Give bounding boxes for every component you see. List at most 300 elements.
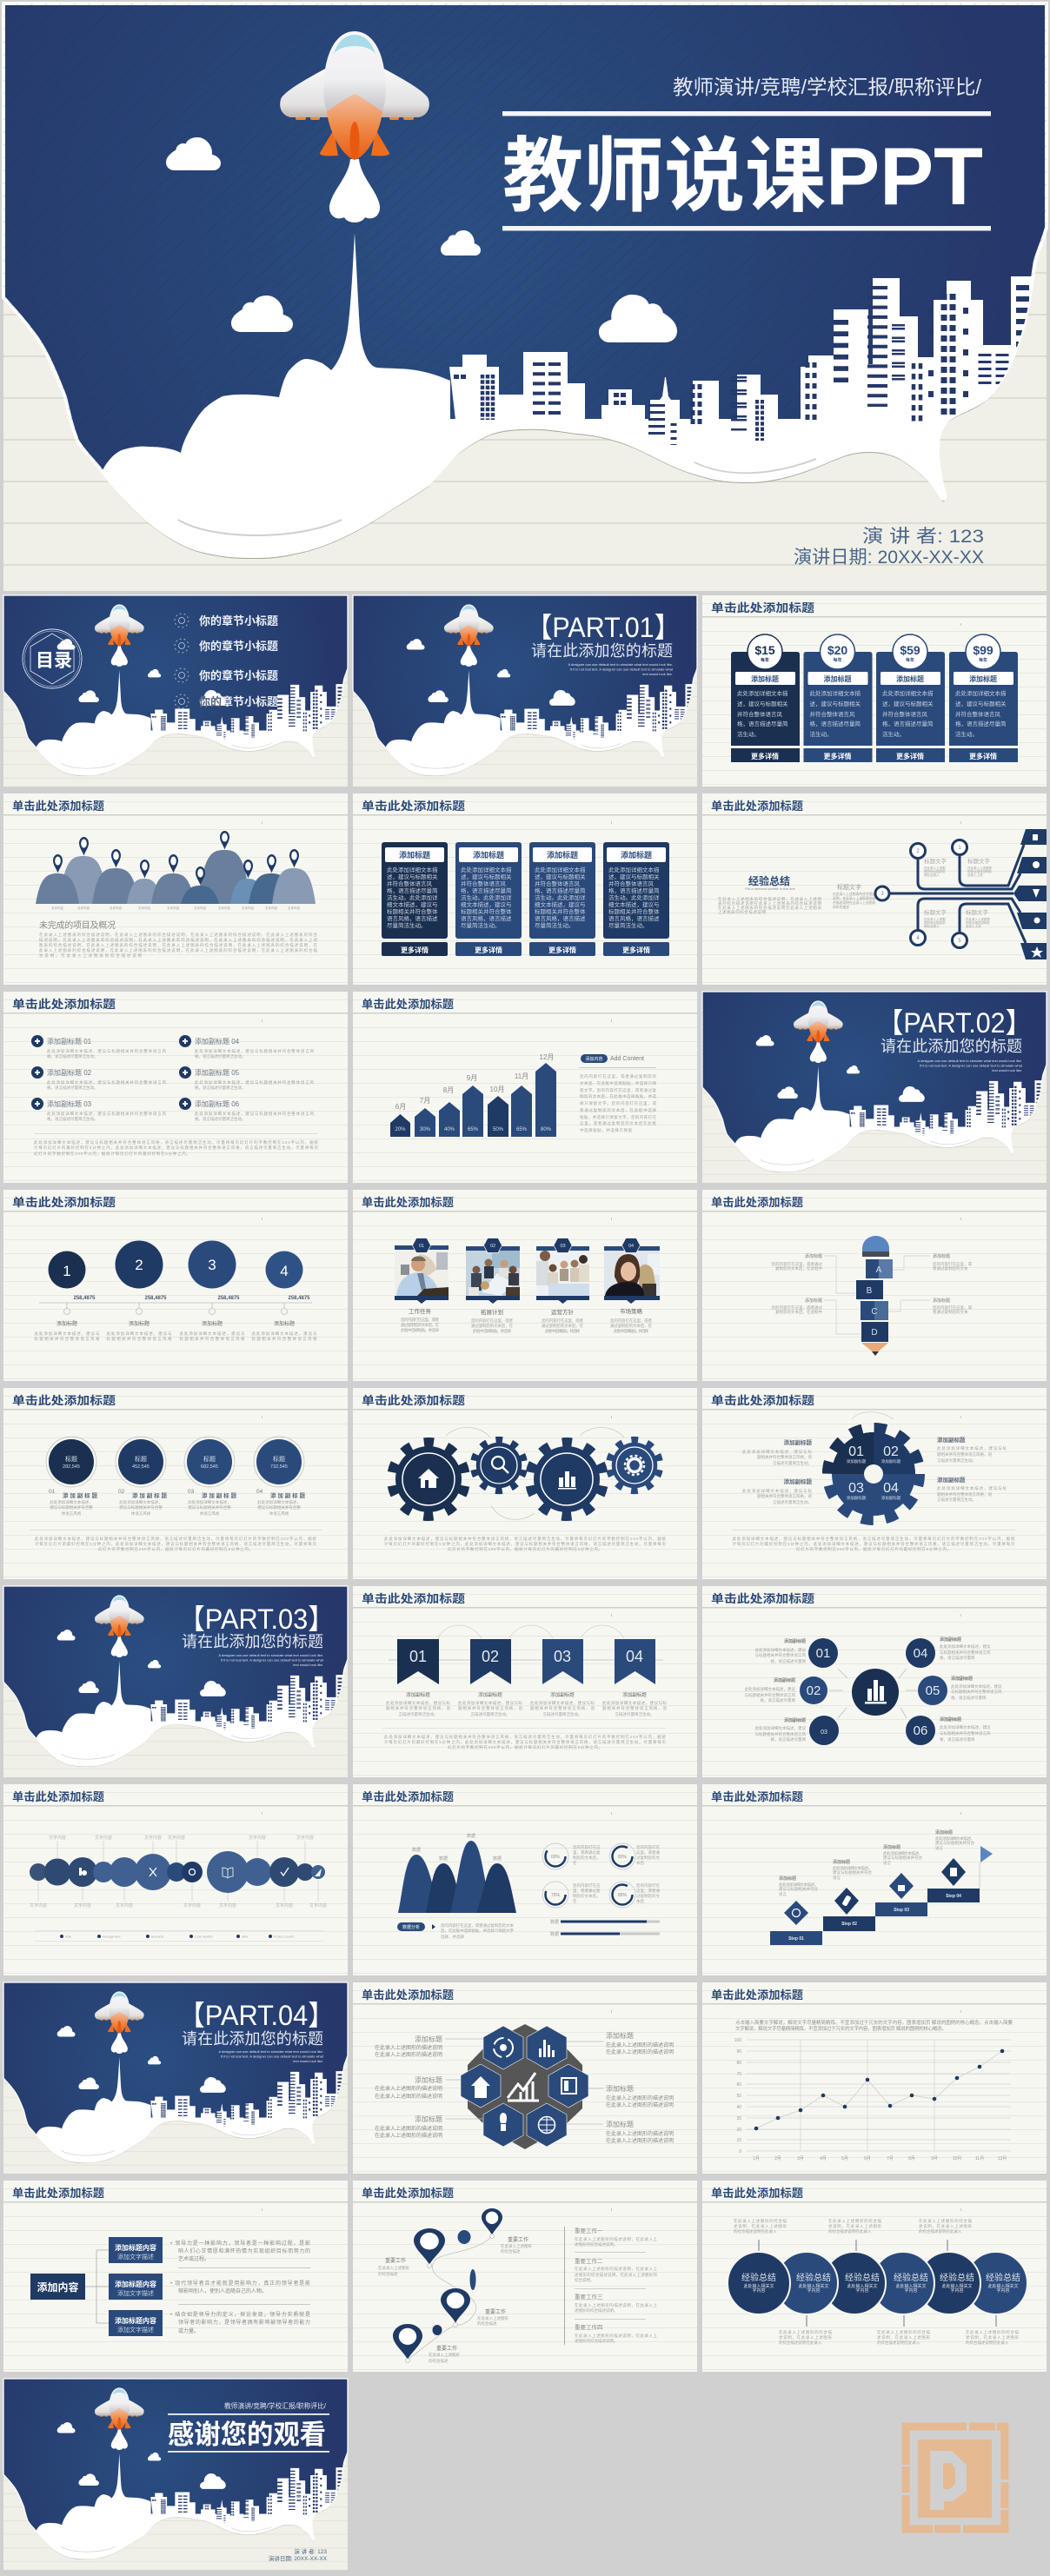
bar chart: 8月: [443, 1086, 454, 1094]
slide title: 单击此处添加标题: [12, 1394, 116, 1407]
quadrant gear: 02: [883, 1444, 899, 1459]
subtitles: 此处添加详细文本描述，: [188, 1499, 231, 1505]
number circles: [49, 1241, 302, 1288]
donut captions: 过复制您的文: [636, 1893, 660, 1899]
data circles: 282,545: [63, 1464, 80, 1470]
right labels: 者通过复制您的文本: [933, 1265, 968, 1271]
right labels: 添加标题: [933, 1253, 950, 1259]
quadrant gear: 添加副标题: [881, 1458, 901, 1464]
photo captions: 通过复制您的文本后，在: [401, 1322, 440, 1328]
legend: Role: [65, 1935, 71, 1938]
slide: thank you: [3, 2379, 348, 2570]
ribbon captions: 题相关并符合整体语言风格，语: [386, 1705, 450, 1711]
axis and arcs: [389, 1625, 663, 1660]
line chart: 100: [734, 2038, 741, 2043]
root box: [30, 2274, 85, 2300]
values: 258,4875: [73, 1296, 96, 1301]
stair notes: 语言: [935, 1845, 943, 1851]
right labels: 添加标题: [933, 1298, 950, 1304]
card 1: 每年: [761, 657, 769, 663]
circuit tree diagram: [875, 840, 1026, 947]
left notes: 添加副标题: [784, 1717, 806, 1723]
quadrant gear: 04: [883, 1481, 899, 1496]
card 3: 每年: [906, 657, 914, 663]
right notes: 言描述尽量简洁生动。: [937, 1457, 976, 1464]
slide title: 单击此处添加标题: [711, 1196, 803, 1209]
labels: 添加标题: [129, 1320, 150, 1327]
card 1: 并符合整体语言风: [737, 710, 782, 718]
contents list: 你的章节小标题: [199, 695, 278, 708]
donut captions: 里，或者通过复: [573, 1888, 601, 1894]
slide title: 单击此处添加标题: [362, 998, 454, 1011]
card 1: 标题相关并符合整体: [387, 907, 438, 915]
part heading: 【PART.01】: [526, 612, 681, 643]
slide: contents: [3, 595, 348, 787]
bubble labels: 文字内容: [30, 1902, 47, 1909]
spokes: [829, 1669, 918, 1718]
ribbon captions: [386, 1691, 668, 1717]
body text: 在此录入上述图表的综合描述说明，在此录入上述图表的综合描述说明，在此录入上述图表的综合描述说明，在此录入上述图表的综合: [39, 932, 318, 938]
footnote text: 此处添加详细文本描述，建议与标题相关并符合整体语言风格，语言描述尽量简洁生动。尽量将每页幻灯片的字数控制在200字以内，据统: [34, 1139, 318, 1145]
slide: hub and spokes: [702, 1586, 1047, 1777]
branch labels: 的综合描述说明在: [966, 920, 990, 925]
cover art: [3, 1982, 348, 2174]
circle labels: 经验总结: [741, 2272, 776, 2283]
quadrant gear: 添加副标题: [847, 1495, 867, 1501]
presenter info: [269, 2547, 328, 2562]
hills chart: 文本内容: [138, 906, 150, 910]
data circles: 标题: [135, 1455, 147, 1463]
labels: 添加标题: [56, 1320, 77, 1327]
branch labels: 表的综合描述说: [924, 920, 946, 925]
right labels: 者通过复制您的文本: [933, 1309, 968, 1315]
list items left: 此处添加详细文本描述，建议与标题相关并符合整体语言风: [47, 1048, 167, 1054]
footnote text: 计每页幻灯片的最好控制在5分钟之内。此处添加详细文本描述，建议与标题相关并符合整体语言风格，语言描述尽量简洁生动。尽量将每页: [34, 1145, 318, 1151]
slide title: 单击此处添加标题: [711, 601, 814, 614]
line chart: 4月: [820, 2156, 827, 2161]
card 1: 并符合整体语言风: [387, 880, 433, 887]
data circles: 732,545: [270, 1464, 288, 1470]
circle labels: 字内容: [904, 2287, 918, 2294]
stair notes: 语言: [833, 1875, 841, 1881]
branch box 3: 添加标题内容: [115, 2316, 156, 2325]
right notes: 在此录入上述图形的描述说明: [606, 2137, 674, 2144]
branch text: 响人们心甘情愿和满怀热情为实现组织目标而努力的: [178, 2247, 310, 2254]
left notes: [375, 2035, 483, 2139]
bottom notes: 的综合描述说明在此录入: [966, 2340, 1009, 2346]
donut captions: 这里，或者通: [636, 1888, 660, 1894]
left labels: 您的内容打在这里，或者通过: [772, 1305, 822, 1311]
right edge icon tabs: [1013, 829, 1047, 959]
labels: 此处添加详细文本描述，建议与: [179, 1331, 245, 1337]
branch labels: 表的综合描述说: [924, 869, 946, 873]
left notes: 题相关并符合整体语言风格，语: [757, 1454, 812, 1460]
slide: numbered circles timeline: [3, 1190, 348, 1381]
card 2: 更多详情: [824, 752, 852, 760]
right notes: 在此录入上述图形的描述说明: [606, 2095, 674, 2101]
bubble labels: 文字内容: [296, 1835, 314, 1841]
card 4: 格，语言描述尽量简: [608, 886, 660, 894]
left notes: 在此录入上述图形的描述说明: [375, 2093, 442, 2100]
card 4: 并符合整体语言风: [608, 880, 654, 887]
card 3: 并符合整体语言风: [882, 710, 928, 718]
slide: line chart: [702, 1982, 1047, 2174]
line chart: 80: [736, 2061, 741, 2066]
circle labels: 字内容: [996, 2287, 1010, 2294]
donut captions: 您的内容打在这: [573, 1882, 601, 1889]
bar chart: 11月: [515, 1072, 528, 1080]
branch labels: 标题文字: [966, 908, 989, 916]
presenter info: 演讲日期: 20XX-XX-XX: [794, 548, 984, 568]
bar chart: 12月: [540, 1053, 554, 1061]
part heading: 【PART.02】: [877, 1007, 1032, 1039]
hills chart: 文本内容: [77, 906, 90, 910]
data pill note: 后，在此框中选择粘贴，并选择只保留文字: [441, 1928, 515, 1934]
photo card 3: [536, 1238, 589, 1304]
left notes: 添加副标题: [784, 1638, 806, 1644]
photo captions: [401, 1307, 652, 1334]
number circles: 1: [63, 1263, 71, 1279]
labels: 标题相关并符合整体语言风格: [35, 1336, 100, 1342]
subtitles: 添加副标题: [63, 1491, 97, 1499]
side text: 您的内容打在这里，或者通过复制您的: [580, 1073, 657, 1079]
bubble labels: 文字内容: [144, 1835, 162, 1841]
part subtitle: 请在此添加您的标题: [182, 2030, 323, 2048]
bubble labels: [30, 1835, 327, 1909]
labels: 添加标题: [202, 1320, 223, 1327]
card 3: 更多详情: [548, 946, 576, 954]
footnote text: [384, 1530, 666, 1552]
data circles: 452,545: [132, 1464, 150, 1470]
list items right: 此处添加详细文本描述，建议与标题相关并符合整体语言风: [195, 1111, 315, 1117]
top notes: 在此录入上述图形的综合描: [919, 2218, 972, 2224]
pencil graphic: [856, 1236, 893, 1356]
left notes: 此处添加详细文本描述，建议与标: [742, 1488, 812, 1494]
subtitles: 01: [49, 1489, 56, 1495]
top notes: 的综合描述说明在此录入: [734, 2228, 777, 2234]
line chart: 3月: [797, 2156, 804, 2161]
values: 258,4875: [217, 1296, 240, 1301]
hills chart: 文本内容: [110, 906, 122, 910]
stair notes: 添加标题: [833, 1859, 850, 1865]
top notes: 在此录入上述图形的综合描: [828, 2218, 881, 2224]
card 1: 更多详情: [751, 752, 779, 760]
branch labels: 在此录入上述图: [924, 917, 946, 921]
clouds: [166, 137, 677, 342]
left notes: 题相关并符合整体语言风格，语: [757, 1493, 812, 1499]
circle labels: 经验总结: [845, 2272, 880, 2283]
slide: hills chart: [3, 793, 348, 985]
photo card 2: [466, 1238, 520, 1304]
labels: 此处添加详细文本描述，建议与: [252, 1331, 316, 1337]
right list: 重要工作三: [575, 2293, 603, 2300]
card 4: 洁生动。此处添加详: [608, 893, 660, 901]
slide: content tree: [3, 2181, 348, 2372]
bar chart: 65%: [516, 1127, 528, 1132]
english note: A designer can use default text to simulate what text would look like.: [218, 1653, 323, 1657]
pencil graphic: D: [871, 1328, 878, 1338]
circuit tree diagram: 1: [958, 846, 961, 851]
card 3: [529, 842, 595, 956]
bubble labels: 文字内容: [309, 1902, 327, 1909]
card 4: 更多详情: [622, 946, 650, 954]
pin labels: 的综合描述: [477, 2320, 497, 2327]
bubble labels: 文字内容: [168, 1835, 185, 1841]
left labels: 复制您的文本后，在此框中: [775, 1265, 822, 1271]
branch labels: 标题文字: [924, 857, 947, 865]
hero subtitle: 教师演讲/竞聘/学校汇报/职称评比/: [673, 76, 982, 98]
contents list: 你的: [199, 695, 222, 708]
card 2: 述，建议与标题相关: [810, 700, 861, 707]
list items right: 格，语言描述尽量简洁生动。: [195, 1053, 245, 1059]
satellites: 01: [816, 1646, 830, 1661]
stair notes: 语言: [779, 1891, 787, 1897]
card 4: 此处添加详细文本描: [955, 689, 1007, 697]
bar chart: 20%: [395, 1127, 406, 1132]
right list: 述图形的综合描述说明。: [575, 2241, 617, 2247]
slide: location pins: [353, 2181, 697, 2372]
card 2: 洁生动。: [810, 730, 833, 738]
closing title: 感谢您的观看: [168, 2420, 326, 2450]
slide title: 单击此处添加标题: [362, 800, 465, 813]
card 2: 添加标题: [824, 674, 852, 683]
card 1: 格，语言描述尽量简: [737, 720, 788, 727]
circle labels: [741, 2272, 1020, 2294]
pencil graphic: C: [871, 1307, 878, 1317]
footnote text: 此处添加详细文本描述，建议与标题相关并符合整体语言风格，语言描述尽量简洁生动。尽量将每页幻灯片的字数控制在200字以内，据统: [35, 1536, 316, 1542]
card 4: 并符合整体语言风: [955, 710, 1001, 718]
right list: 在此录入上述图形的描述说明，在此录入上: [575, 2302, 657, 2308]
line chart: 5月: [841, 2156, 848, 2161]
right notes: 添加副标题: [940, 1637, 961, 1643]
branch box 2: 添加文字描述: [117, 2289, 154, 2297]
side text: 文本后，在此框中选择粘贴，并选择只保: [580, 1080, 657, 1086]
card 1: 尽量简洁生动。: [387, 921, 426, 929]
right list: 在此录入上述图形的描述说明，在此录入上: [575, 2266, 657, 2272]
right notes: 此处添加详细文本描述，建议与标: [937, 1445, 1007, 1451]
photo card 2: 02: [490, 1244, 495, 1249]
card 1: [382, 842, 448, 956]
cover art: [3, 1586, 348, 1777]
subtitles: 建议与标题相关并符合整: [119, 1504, 163, 1510]
card 3: 标题相关并符合整体: [535, 907, 586, 915]
summary text: 的综合描述: [833, 905, 849, 909]
stair notes: 此处添加详细文本描述，: [935, 1836, 974, 1842]
line chart: 50: [736, 2094, 741, 2099]
right list: 重要工作一: [575, 2227, 603, 2234]
card 2: 述，建议与标题相关: [461, 873, 512, 880]
side text: 者通过复制您的文本后，在此框中选择: [580, 1107, 657, 1113]
branch labels: 的综合描述说明在: [967, 869, 992, 873]
card 4: [603, 842, 669, 956]
donut captions: 75%: [551, 1893, 561, 1898]
ribbon captions: 言描述尽量简洁生动。: [471, 1711, 509, 1717]
circle labels: 字内容: [950, 2287, 964, 2294]
chart intro text: 文字解说，解说文字尽量精简精炼，不宜添加过于冗长的文字内容，图表增加页 解说的图例的核心概念。: [735, 2025, 947, 2032]
part heading: 【PART.03】: [178, 1603, 335, 1635]
legend: Case Studies: [195, 1935, 213, 1938]
right notes: 此处添加详细文本描述，建议: [940, 1643, 991, 1650]
stair notes: 建议与标题相关并符合: [935, 1840, 975, 1846]
subtitles: 添加副标题: [202, 1491, 236, 1499]
footnote text: [34, 1133, 318, 1157]
slide: four cards: [353, 793, 697, 985]
card 1: 细文本描述，建议与: [387, 900, 438, 908]
circle labels: 字内容: [807, 2287, 821, 2294]
english note: [917, 1059, 1023, 1072]
slide: ribbons: [353, 1586, 697, 1777]
ribbon captions: 添加副标题: [478, 1691, 502, 1698]
stair notes: 此处添加详细文本描述，: [883, 1850, 922, 1856]
labels: 标题相关并符合整体语言风格: [252, 1336, 317, 1342]
left notes: 格，语言描述尽量简: [770, 1736, 806, 1743]
legend: Web: [242, 1935, 248, 1938]
subtitles: 体语言风格: [269, 1510, 289, 1517]
slide title: 单击此处添加标题: [362, 2187, 454, 2200]
card 1: $15: [754, 643, 775, 657]
list items right: 格，语言描述尽量简洁生动。: [195, 1116, 245, 1122]
photo captions: 此框中选择粘贴，并选择: [545, 1328, 581, 1334]
right labels: 您的内容打在这里，或: [933, 1305, 972, 1311]
circle labels: 经验总结: [894, 2272, 928, 2283]
contents list: [175, 614, 278, 708]
slide: hexagon cluster: [353, 1982, 697, 2174]
stairs: Step 03: [894, 1908, 909, 1913]
slide title: 单击此处添加标题: [12, 998, 116, 1011]
right notes: 此处添加详细文本描述，建议: [951, 1683, 1002, 1690]
top notes: [734, 2218, 972, 2234]
left notes: 此处添加详细文本描述，建议与标: [742, 1449, 812, 1455]
right notes: 与标题相关并符合整体语言风: [940, 1730, 991, 1736]
bubble labels: 文字内容: [276, 1902, 293, 1909]
hub icon: [852, 1669, 899, 1716]
card 2: 并符合整体语言风: [810, 710, 855, 718]
card 1: [731, 634, 800, 762]
left notes: 与标题相关并符合整体语言风: [754, 1652, 806, 1658]
hills chart: 文本内容: [194, 906, 206, 910]
card 4: 标题相关并符合整体: [608, 907, 660, 915]
peaks chart: 数据: [412, 1847, 421, 1853]
card 2: 更多详情: [475, 946, 502, 954]
peaks chart: 数据: [439, 1856, 448, 1862]
stair notes: 建议与标题相关并符合: [779, 1886, 819, 1892]
right list: 重要工作四: [575, 2323, 603, 2331]
top notes: 在此录入上述图形的综合描: [734, 2218, 788, 2224]
left notes: 在此录入上述图形的描述说明: [375, 2051, 442, 2058]
subtitles: 此处添加详细文本描述，: [119, 1499, 163, 1505]
quadrant gear: 01: [848, 1444, 864, 1459]
stair notes: 添加标题: [779, 1876, 796, 1882]
slide title: 单击此处添加标题: [12, 800, 104, 813]
arc arrow: [852, 1412, 894, 1419]
bubble labels: 文字内容: [74, 1902, 91, 1909]
progress bars: 数据: [550, 1919, 559, 1925]
left labels: 添加标题: [805, 1298, 822, 1304]
list items left: 此处添加详细文本描述，建议与标题相关并符合整体语言风: [47, 1111, 167, 1117]
branch box 3: 添加文字描述: [117, 2326, 154, 2334]
card 3: 此处添加详细文本描: [882, 689, 934, 697]
footnote text: [30, 1530, 322, 1552]
summary text: 在此录入上述图表的综合描述: [833, 892, 876, 896]
slide: month arrow bars: [353, 992, 697, 1183]
list items left: 添加副标题 03: [47, 1099, 92, 1108]
card 1: 添加标题: [399, 850, 430, 860]
side text: [580, 1073, 657, 1133]
ribbon 03: 03: [554, 1648, 571, 1665]
labels: 标题相关并符合整体语言风格: [179, 1336, 245, 1342]
branch text: 艺术或过程。: [178, 2255, 209, 2262]
bottom notes: 的综合描述说明在此录入: [779, 2340, 822, 2346]
english note: If it is not real text. A designer can use default text to simulate what: [221, 2055, 324, 2058]
slide: six item list: [3, 992, 348, 1183]
right notes: [940, 1637, 1002, 1743]
watermark logo: [906, 2427, 1005, 2529]
satellites: 06: [914, 1723, 927, 1738]
progress bars: [550, 1919, 660, 1937]
right notes: 题相关并符合整体语言风格，语: [937, 1491, 992, 1497]
photo card 1: [395, 1238, 449, 1304]
summary text: 说明，在此录入上述图表的综: [833, 896, 876, 900]
left notes: 言描述尽量简洁生动。: [773, 1460, 812, 1466]
left notes: 与标题相关并符合整体语言风: [744, 1692, 795, 1698]
donut captions: 您的内容打在这: [573, 1844, 601, 1850]
left labels: 添加标题: [805, 1253, 822, 1259]
stair notes: [779, 1829, 975, 1897]
left labels: 复制您的文本后，在此框中: [775, 1309, 822, 1315]
hills chart: 文本内容: [288, 906, 300, 910]
card 2: 标题相关并符合整体: [461, 907, 512, 915]
rule top: [168, 2413, 329, 2415]
slide: pricing cards: [702, 595, 1047, 787]
branch box 2: [109, 2274, 163, 2300]
right list: 述图形的综合描述说明，在此录入上述图形的: [575, 2272, 657, 2278]
line chart: 9月: [931, 2156, 938, 2161]
right notes: 添加副标题: [951, 1676, 973, 1682]
donut captions: 在: [573, 1898, 577, 1903]
gear: home: [386, 1437, 471, 1522]
left labels: [772, 1253, 861, 1334]
branch box 1: [109, 2237, 163, 2263]
branch text: 或力量。: [178, 2327, 199, 2334]
photo captions: 您的内容打在这里，或者: [471, 1318, 513, 1324]
summary text: 表的综合描述说明在此录入上述图表的综合描述说明: [718, 900, 822, 906]
english note: A designer can use default text to simulate what text would look like.: [917, 1059, 1022, 1063]
left notes: 此处添加详细文本描述，建议: [744, 1686, 795, 1692]
subheading: 未完成的项目及概况: [39, 920, 116, 931]
footnote text: 幻灯片的字数控制在200字以内，据统计每页幻灯片的最好控制在5分钟之内。: [796, 1546, 951, 1552]
card 3: 格，语言描述尽量简: [535, 886, 586, 894]
hills chart: 文本内容: [265, 906, 277, 910]
card 4: 每年: [979, 657, 987, 663]
footnote text: 计每页幻灯片的最好控制在5分钟之内。此处添加详细文本描述，建议与标题相关并符合整体语言风格，语言描述尽量简洁生动。尽量将每页: [384, 1541, 666, 1547]
bottom notes: 在此录入上述图形的综合描: [877, 2329, 930, 2335]
right notes: 在此录入上述图形的描述说明: [606, 2042, 674, 2048]
card 3: 述，建议与标题相关: [535, 873, 586, 880]
line chart: 10月: [953, 2156, 961, 2161]
top notes: 述说明，在此录入上述图形: [828, 2223, 881, 2229]
slide: quadrant gear: [702, 1388, 1047, 1579]
list items right: 此处添加详细文本描述，建议与标题相关并符合整体语言风: [195, 1079, 315, 1086]
right notes: 在此录入上述图形的描述说明: [606, 2130, 674, 2137]
slide: four data circles: [3, 1388, 348, 1579]
subtitles: 添加副标题: [132, 1491, 167, 1499]
side text: 择只保留文字。您的内容打在这里，或: [580, 1100, 657, 1106]
ribbon captions: 此处添加详细文本描述，建议与标: [386, 1700, 450, 1706]
part subtitle: 请在此添加您的标题: [881, 1038, 1022, 1055]
bar chart: 6月: [395, 1103, 406, 1111]
photo captions: 拓展计划: [481, 1308, 503, 1316]
right notes: [567, 2031, 674, 2144]
